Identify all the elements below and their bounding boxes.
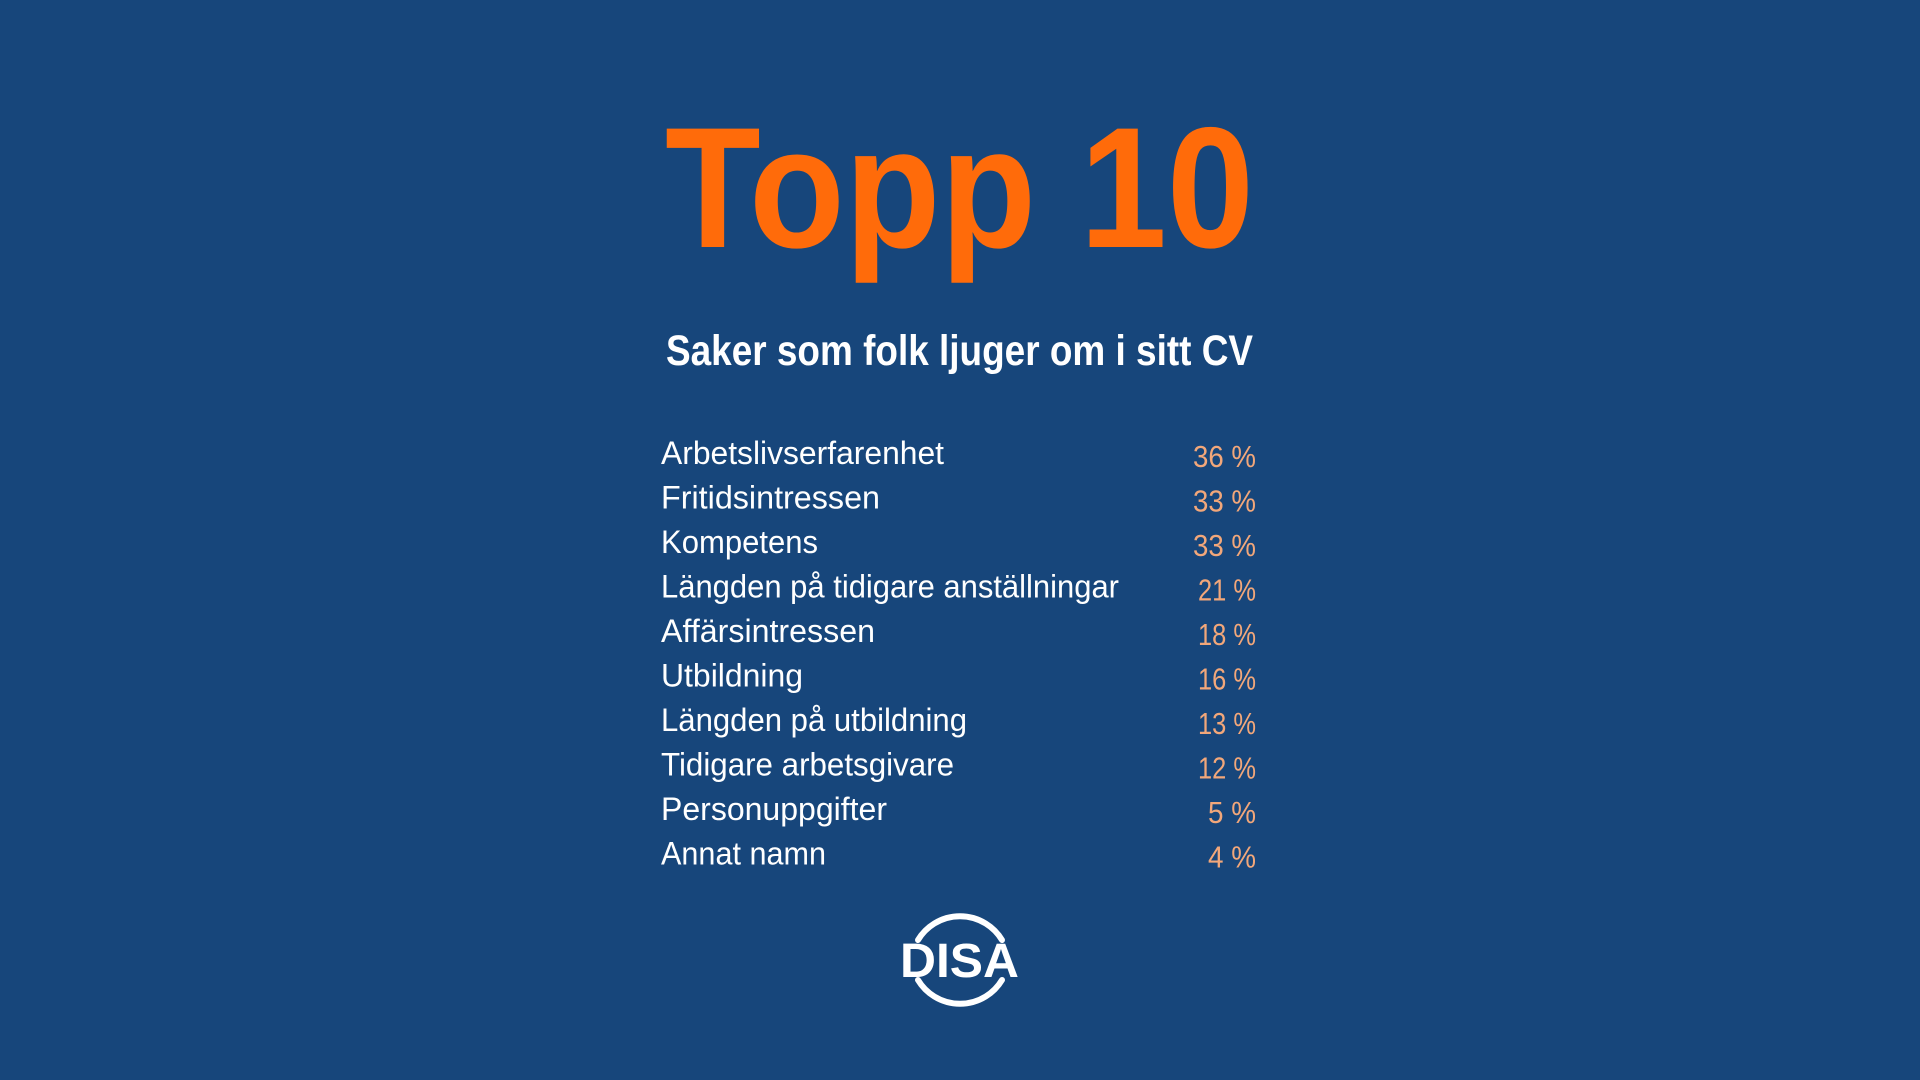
list: items and percentages: Arbetslivserfarenhet [661, 435, 944, 471]
list: items and percentages: 12 % [1198, 750, 1256, 786]
list: items and percentages: Längden på tidigare anställningar [661, 568, 1119, 604]
list: items and percentages: 4 % [1208, 840, 1256, 874]
list: items and percentages: 18 % [1198, 617, 1256, 652]
list: items and percentages: 13 % [1198, 706, 1256, 741]
logo: DISA [900, 916, 1019, 1004]
list: items and percentages: Längden på utbildning [661, 702, 967, 738]
list: items and percentages: Kompetens [661, 524, 818, 560]
list: items and percentages: Tidigare arbetsgivare [661, 746, 954, 782]
list: items and percentages: Personuppgifter [661, 791, 887, 827]
subtitle: Saker som folk ljuger om i sitt CV [666, 327, 1253, 375]
list: items and percentages: Fritidsintressen [661, 480, 880, 516]
list: items and percentages: Affärsintressen [661, 613, 875, 649]
list: items and percentages: 5 % [1208, 795, 1256, 830]
list: items and percentages: 16 % [1198, 662, 1256, 696]
list: items and percentages: Utbildning [661, 658, 803, 694]
list: items and percentages: 33 % [1193, 484, 1256, 518]
list: items and percentages: 36 % [1193, 439, 1256, 474]
logo: DISA: DISA [900, 935, 1019, 988]
list: items and percentages [661, 435, 1256, 874]
list: items and percentages: 21 % [1198, 572, 1256, 608]
title: Topp 10 [665, 92, 1254, 284]
list: items and percentages: Annat namn [661, 836, 826, 872]
list: items and percentages: 33 % [1193, 528, 1256, 563]
